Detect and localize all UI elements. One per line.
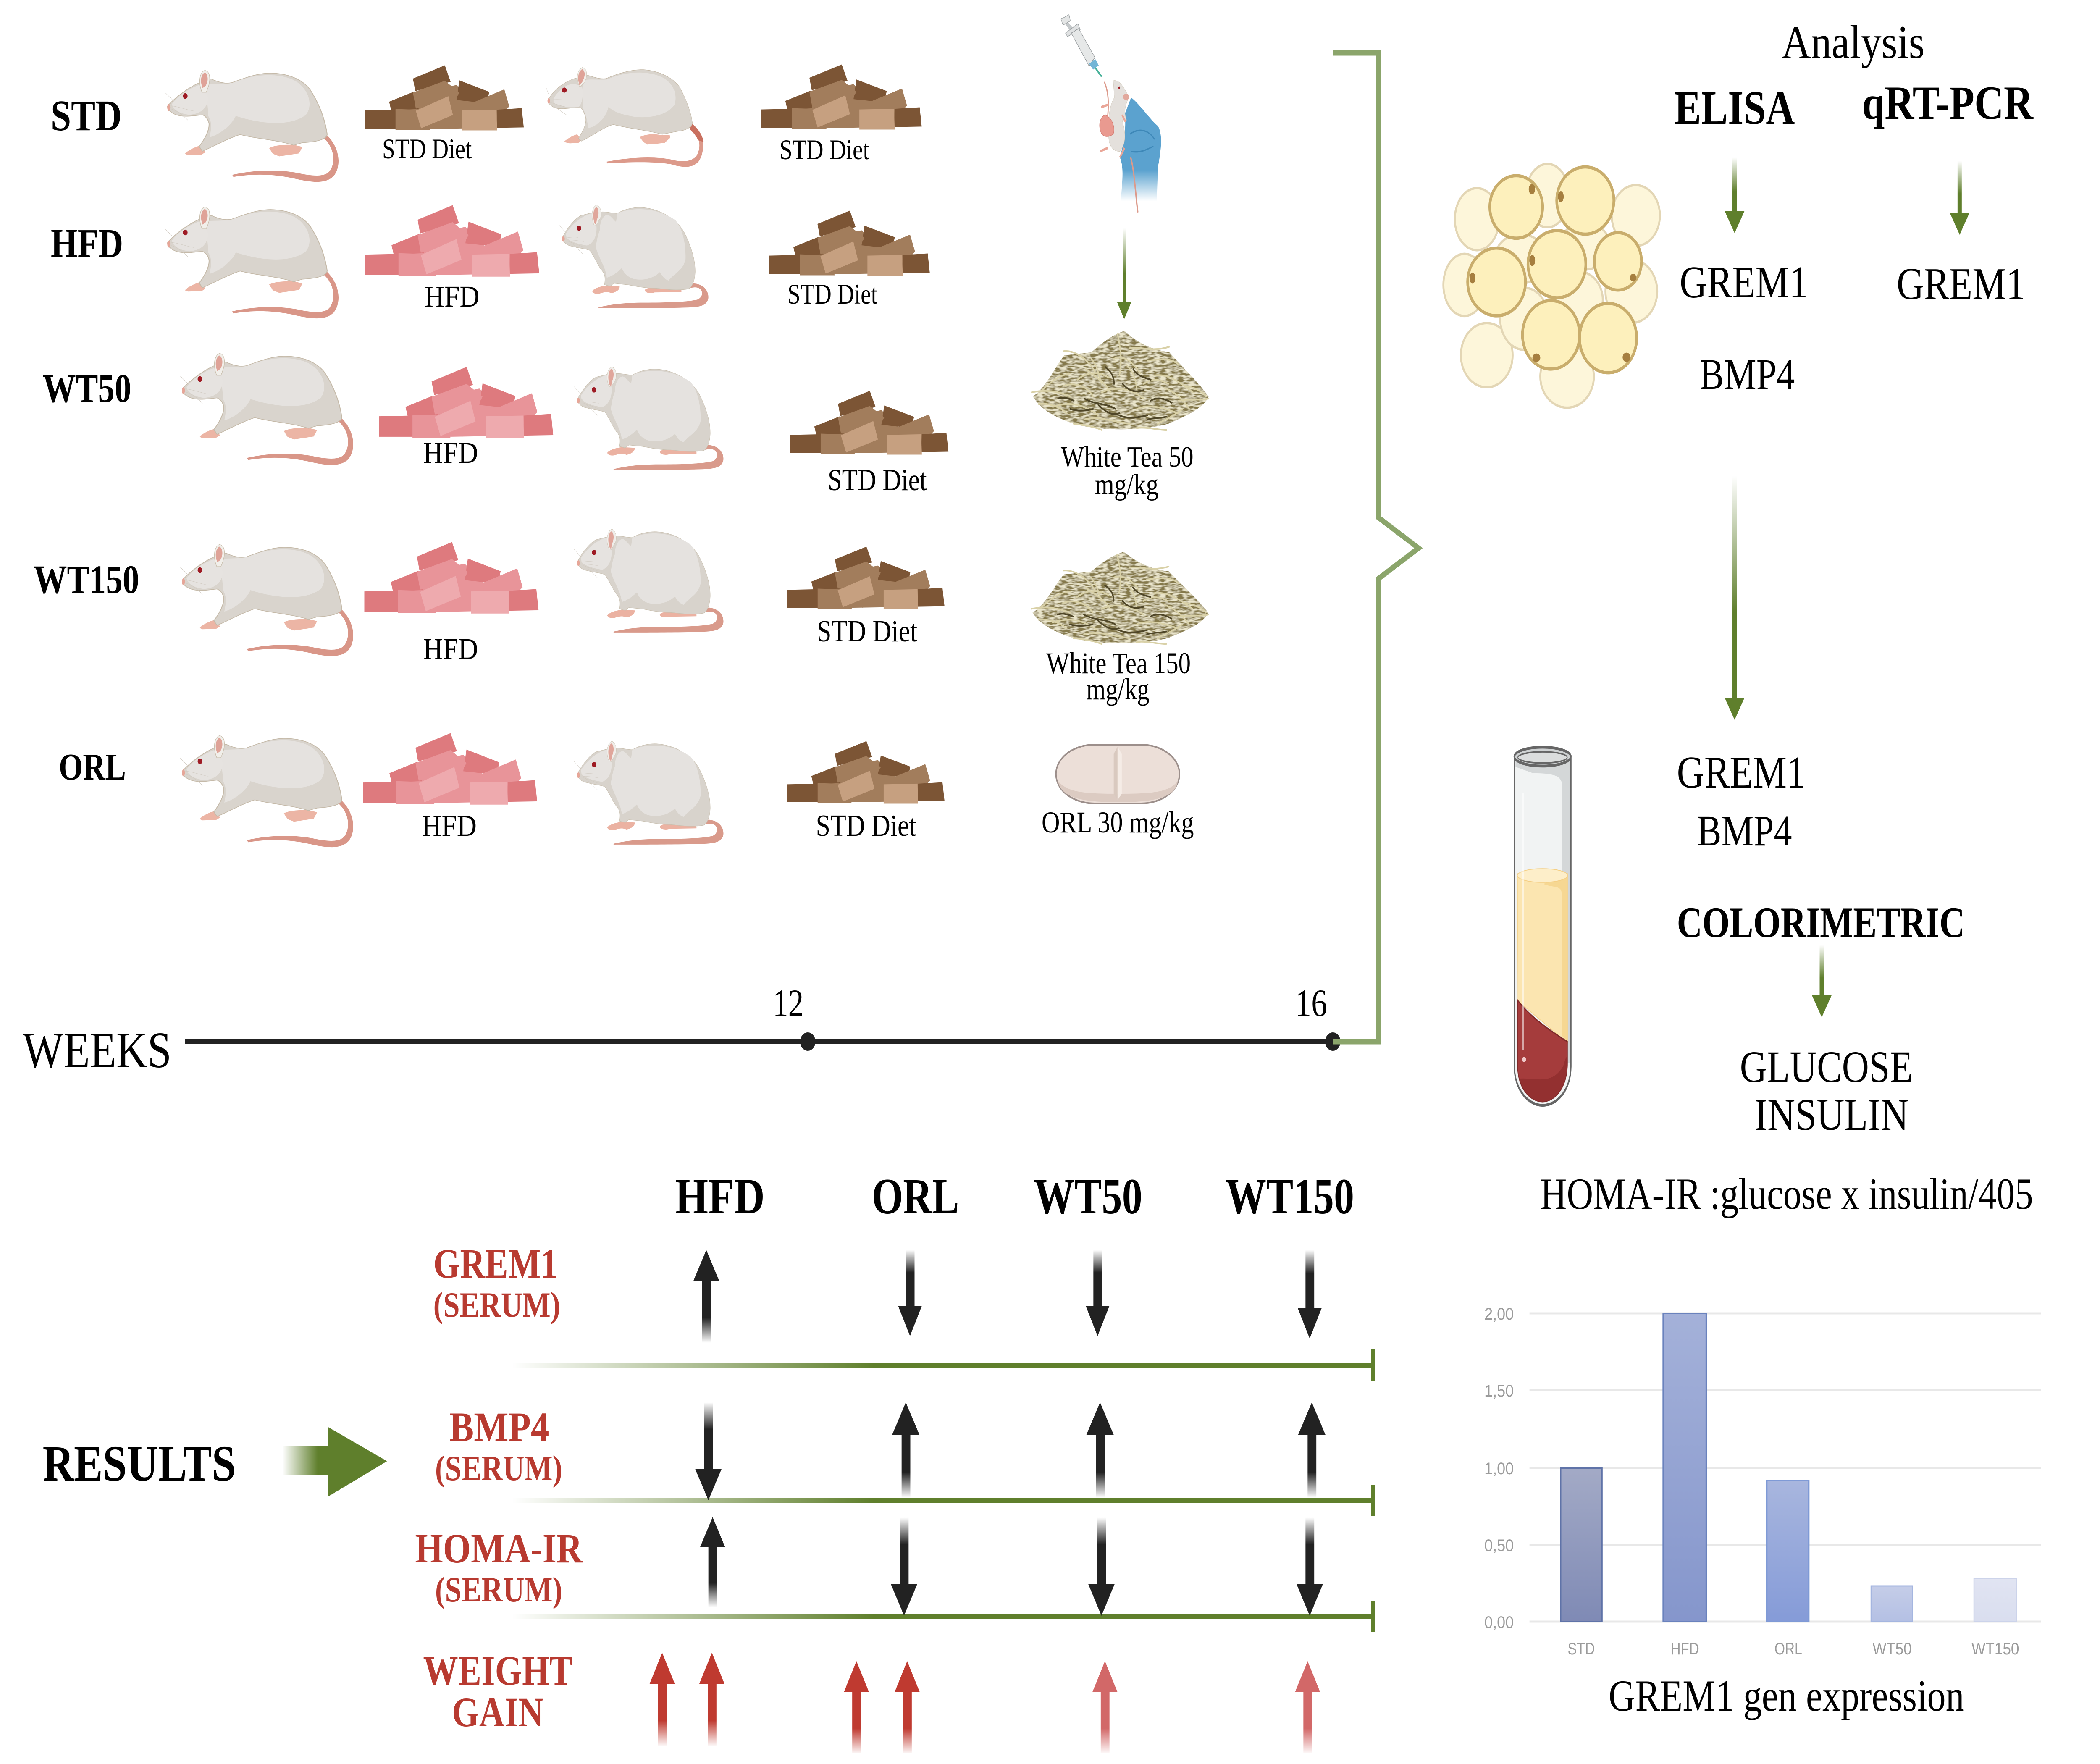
text: GREM1 serum: GREM1 [1677, 747, 1806, 798]
bar chart: GREM1 gene expression: 0,50 [1484, 1536, 1514, 1555]
bar chart: GREM1 gene expression: ORL [1774, 1639, 1802, 1658]
diet label: HFD [422, 809, 477, 843]
icon: rat row 4 start [180, 544, 353, 656]
label: White Tea 150 mg/kg: White Tea 150 [1046, 647, 1191, 680]
icon: oral gavage with syringe and gloved hand [1061, 15, 1161, 213]
heading: RESULTS: RESULTS [43, 1436, 236, 1492]
row label: WT50: WT50 [43, 366, 131, 411]
bracket linking protocol to analysis [1333, 53, 1419, 1042]
results column headings: WT150 [1226, 1169, 1354, 1225]
icon: HFD pellets row 5 [363, 733, 537, 805]
timeline: weeks axis: 12 [773, 982, 803, 1025]
icon: obese rat row 2 [559, 205, 709, 308]
label: BMP4 serum: (SERUM) [435, 1448, 562, 1488]
arrow: gavage to white tea [1117, 228, 1131, 319]
label: BMP4 serum: BMP4 [449, 1404, 549, 1450]
bar chart: GREM1 gene expression: 2,00 [1484, 1305, 1514, 1323]
bar chart: GREM1 gene expression: WT150 [1971, 1639, 2019, 1658]
icon: STD pellets row 1 [365, 66, 524, 131]
diet label: STD Diet [816, 808, 916, 843]
icon: adipocyte cluster [1444, 164, 1660, 408]
timeline: weeks axis [23, 982, 1341, 1079]
row label: HFD: HFD [51, 220, 123, 266]
label: weight gain: WEIGHT [423, 1647, 572, 1694]
text: GREM1 tissue ELISA: GREM1 [1680, 257, 1808, 307]
icon: white tea leaves 150 [1032, 552, 1208, 644]
bar chart: GREM1 gene expression: 0,00 [1484, 1613, 1514, 1632]
diet label: HFD [423, 633, 478, 666]
icon: STD pellets row 5 [788, 741, 945, 803]
label: HOMA-IR serum [415, 1525, 583, 1609]
text: GLUCOSE: GLUCOSE [1740, 1042, 1913, 1092]
divider line GREM1 [512, 1349, 1375, 1381]
diet label: STD Diet [788, 278, 878, 310]
row label: STD: STD [51, 92, 122, 140]
heading: COLORIMETRIC: COLORIMETRIC [1677, 899, 1965, 947]
divider line HOMA-IR [512, 1601, 1375, 1632]
text: BMP4 serum: BMP4 [1697, 807, 1792, 855]
results column headings: ORL [872, 1169, 959, 1225]
arrow: colorimetric down [1812, 945, 1832, 1017]
divider line BMP4 [512, 1485, 1375, 1516]
diet label: STD Diet [382, 133, 472, 165]
arrows: weight gain row [650, 1653, 1320, 1753]
icon: obese rat row 3 [574, 367, 723, 470]
icon: blood tube [1514, 747, 1571, 1105]
icon: rat row 1 week 12 [546, 68, 704, 167]
bar chart: GREM1 gene expression: 1,50 [1484, 1381, 1514, 1400]
diet label: HFD [423, 436, 478, 470]
arrow: results [282, 1427, 387, 1496]
icon: STD pellets row 1 week 16 [761, 65, 922, 130]
icon: HFD pellets row 4 [365, 542, 538, 614]
label: HOMA-IR serum: (SERUM) [435, 1570, 562, 1609]
text: INSULIN: INSULIN [1755, 1089, 1908, 1140]
bar chart: GREM1 gene expression: STD [1568, 1639, 1595, 1658]
icon: STD pellets row 3 [790, 391, 948, 454]
label: HOMA-IR serum: HOMA-IR [415, 1525, 583, 1572]
results column headings [675, 1169, 1354, 1225]
label: GREM1 serum: (SERUM) [433, 1285, 560, 1324]
diet label: STD Diet [780, 134, 870, 165]
icon: orlistat tablet [1056, 745, 1179, 803]
label: White Tea 50 mg/kg: White Tea 50 [1061, 441, 1194, 473]
row label: WT150: WT150 [34, 557, 139, 602]
heading: Analysis: Analysis [1782, 16, 1925, 68]
icon: HFD pellets row 3 [379, 367, 553, 438]
label: weight gain: GAIN [452, 1689, 543, 1735]
arrows: HOMA-IR row [700, 1517, 1323, 1616]
heading: qRT-PCR: qRT-PCR [1862, 77, 2034, 129]
icon: rat row 2 start [165, 207, 339, 318]
caption: GREM1 gen expression: GREM1 gen expression [1609, 1672, 1964, 1721]
icon: rat row 5 start [180, 735, 353, 847]
label: White Tea 150 mg/kg [1046, 647, 1191, 706]
label: White Tea 50 mg/kg [1061, 441, 1194, 501]
results column headings: WT50 [1034, 1169, 1142, 1225]
row label: ORL: ORL [59, 746, 126, 788]
arrow: qRT-PCR down [1950, 161, 1969, 235]
diet label: HFD [425, 280, 480, 313]
diet label: STD Diet [828, 463, 927, 497]
text: HOMA-IR formula: HOMA-IR :glucose x insulin/405 [1541, 1170, 2033, 1219]
icon: STD pellets row 2 [769, 211, 930, 276]
label: GREM1 serum: GREM1 [433, 1240, 558, 1287]
label: ORL 30 mg/kg: ORL 30 mg/kg [1042, 806, 1194, 839]
icon: rat row 3 start [180, 353, 353, 465]
diet label: STD Diet [817, 614, 917, 648]
icon: STD pellets row 4 [788, 546, 945, 609]
arrow: tissue to serum [1725, 476, 1744, 720]
label: GREM1 serum [433, 1240, 560, 1324]
label: weight gain [423, 1647, 572, 1735]
bar chart: GREM1 gene expression: 1,00 [1484, 1459, 1514, 1478]
heading: ELISA: ELISA [1675, 81, 1795, 134]
icon: obese rat row 5 [574, 741, 723, 845]
arrow: ELISA down [1725, 158, 1744, 233]
text: BMP4 tissue ELISA: BMP4 [1700, 350, 1795, 399]
label: White Tea 150 mg/kg: mg/kg [1087, 673, 1150, 706]
bar chart: GREM1 gene expression [1484, 1305, 2041, 1658]
icon: white tea leaves 50 [1032, 331, 1209, 430]
timeline: weeks axis: WEEKS [23, 1022, 171, 1079]
icon: rat row 1 start [165, 70, 339, 182]
bar chart: GREM1 gene expression: HFD [1671, 1639, 1699, 1658]
arrows: GREM1 row [693, 1250, 1322, 1343]
results column headings: HFD [675, 1169, 765, 1225]
bar chart: GREM1 gene expression: WT50 [1872, 1639, 1912, 1658]
label: White Tea 50 mg/kg: mg/kg [1095, 468, 1158, 501]
icon: obese rat row 4 [574, 529, 723, 633]
arrows: BMP4 row [695, 1402, 1326, 1500]
timeline: weeks axis: 16 [1295, 982, 1327, 1025]
text: GREM1 qRT-PCR: GREM1 [1897, 258, 2025, 309]
label: BMP4 serum [435, 1404, 562, 1488]
icon: HFD pellets row 2 [365, 205, 539, 277]
